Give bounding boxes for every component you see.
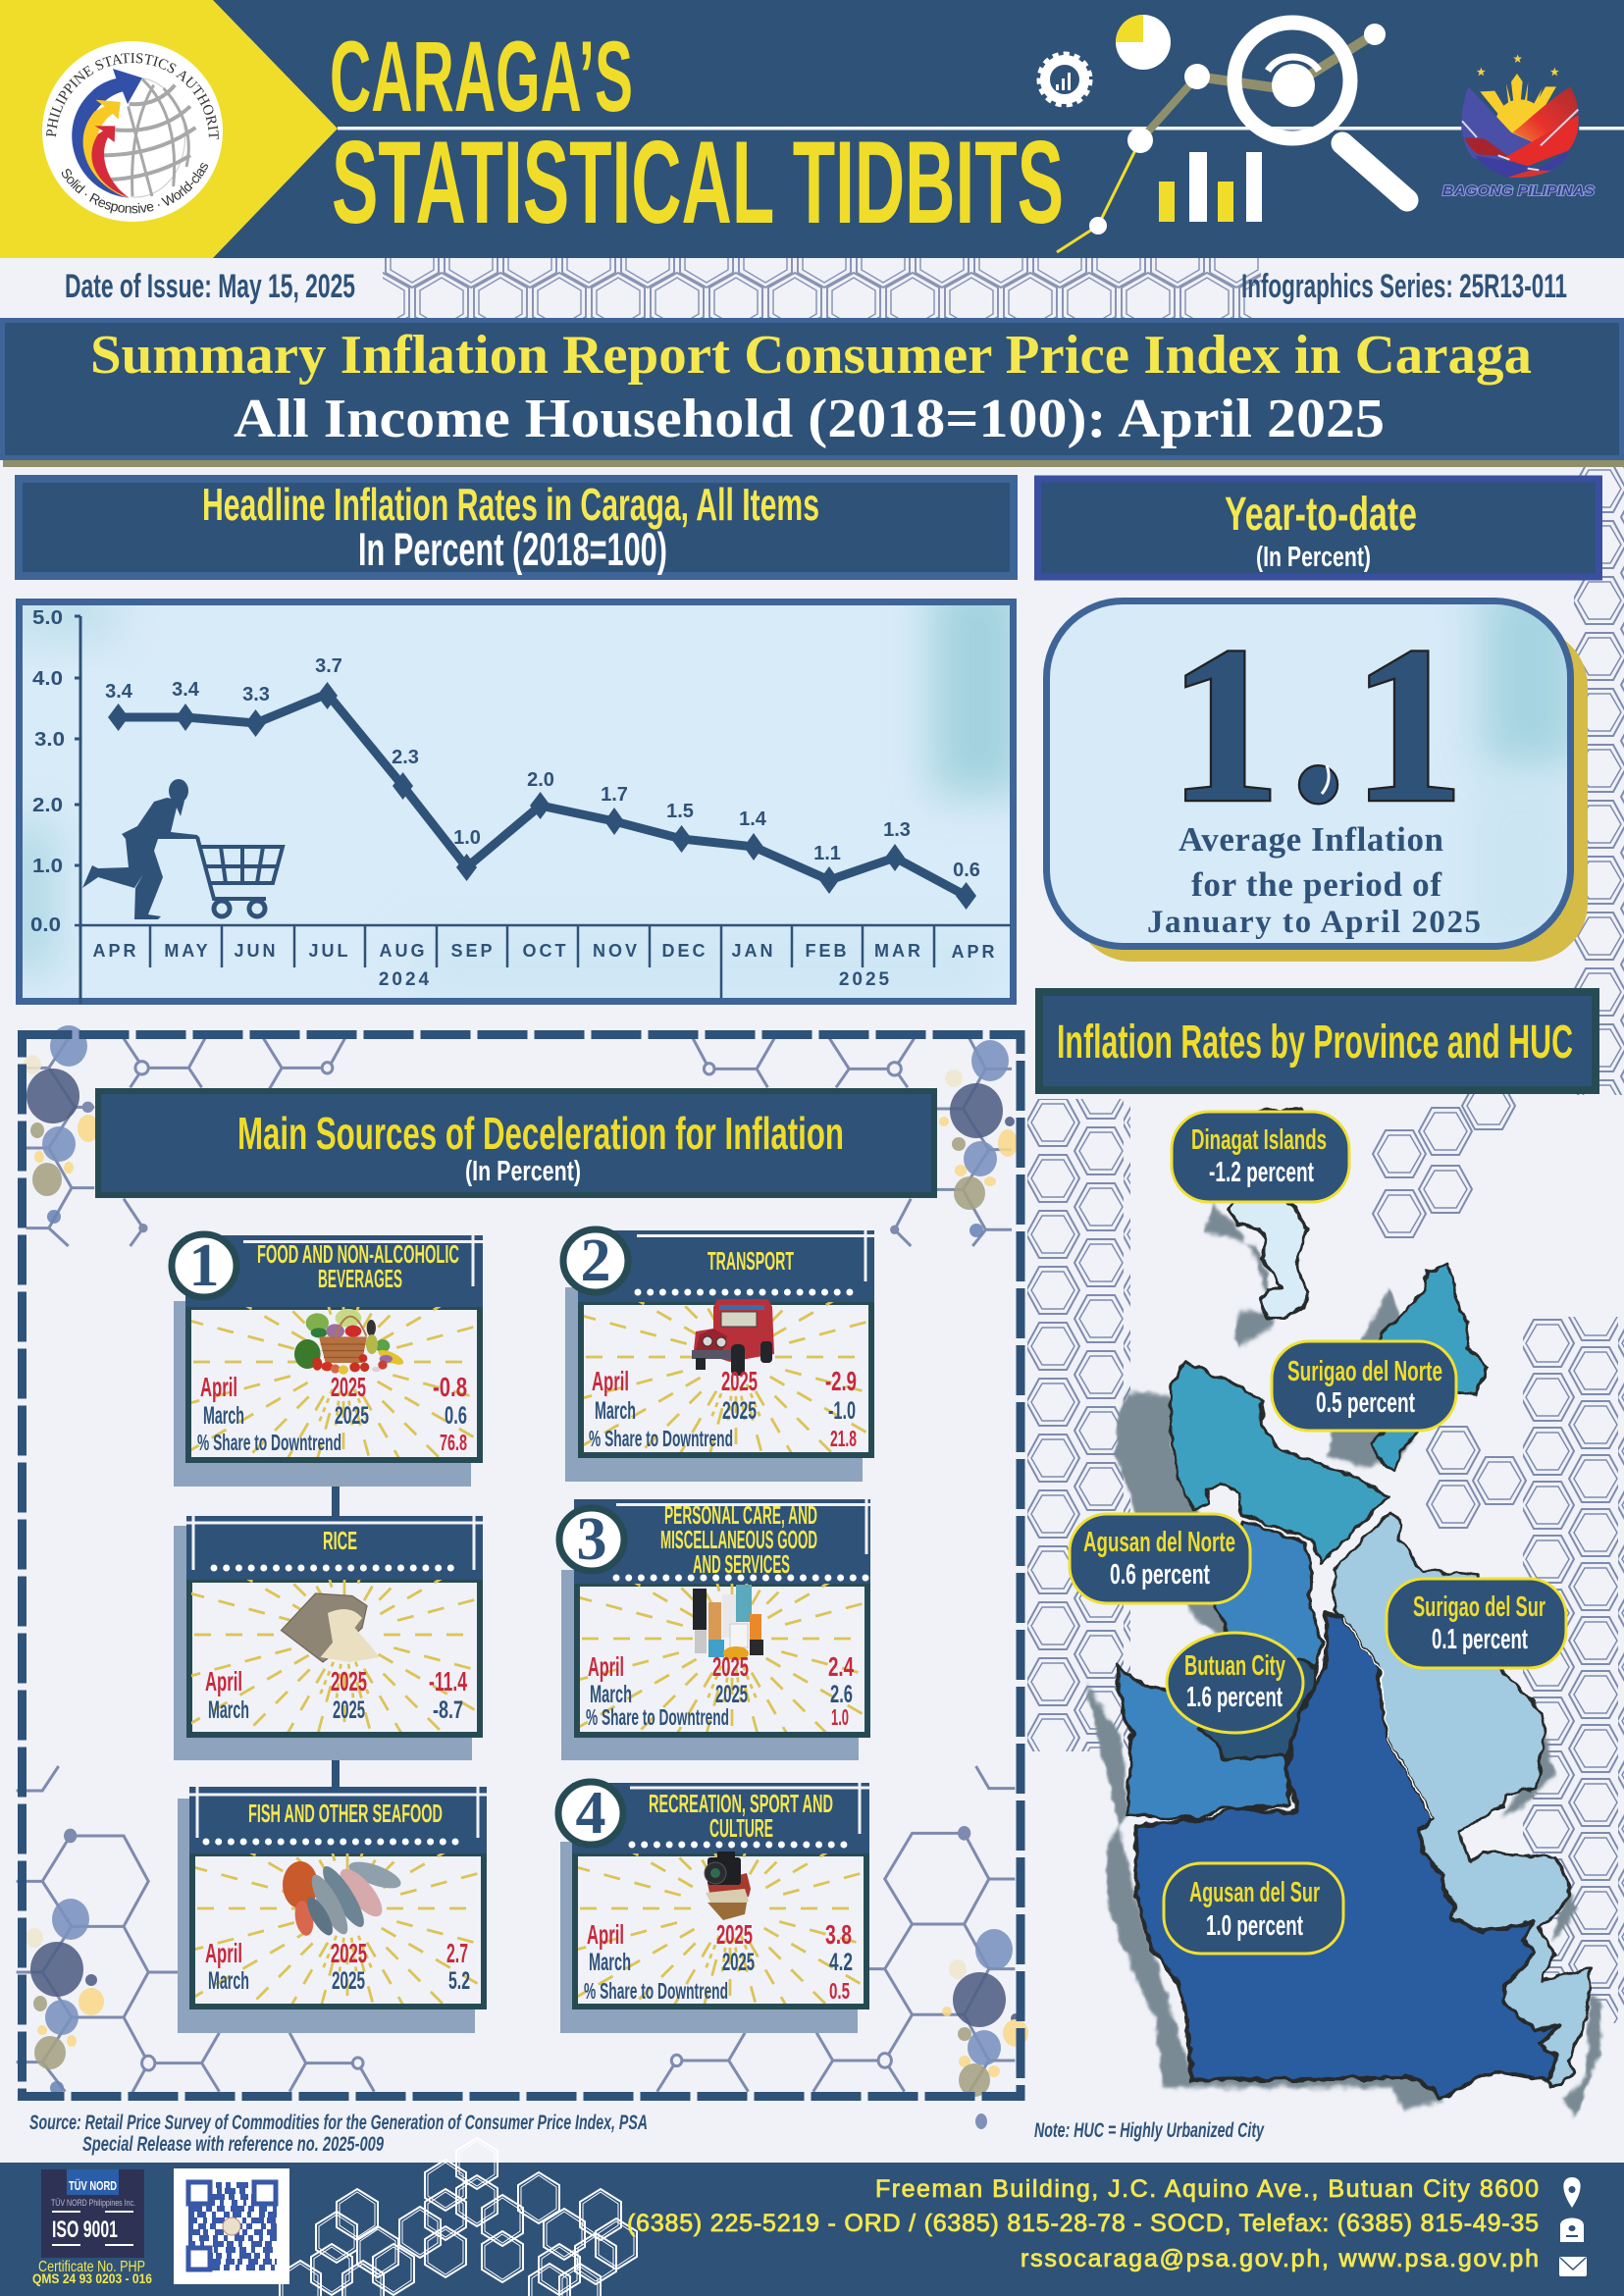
rows: 2025 xyxy=(335,1402,369,1430)
y axis: 3.0 xyxy=(34,729,65,751)
x axis and month labels: APR xyxy=(92,941,139,961)
data labels: 3.3 xyxy=(242,684,270,705)
rows: March xyxy=(589,1949,631,1976)
title: CULTURE xyxy=(709,1813,773,1843)
card: fish and other seafood xyxy=(178,1787,487,2033)
TUV NORD ISO badge xyxy=(32,2169,152,2286)
x axis and month labels: OCT xyxy=(522,941,569,961)
x axis and month labels: AUG xyxy=(379,941,428,961)
rows: April xyxy=(200,1372,237,1402)
rows: 2025 xyxy=(333,1696,365,1724)
data labels: 1.1 xyxy=(813,843,841,864)
y axis: 4.0 xyxy=(32,668,63,690)
inflation line series xyxy=(108,682,976,910)
card: rice xyxy=(174,1516,483,1760)
rank badge xyxy=(559,1506,624,1573)
icon: cosmetics bottles xyxy=(693,1585,763,1660)
icon: jeepney xyxy=(692,1299,774,1376)
rows: March xyxy=(208,1696,249,1724)
Agusan del Norte xyxy=(1117,1520,1321,1819)
rows xyxy=(205,1938,470,1995)
map background hex pattern left xyxy=(1027,1099,1130,1751)
decorative bubbles xyxy=(24,1025,1028,2097)
TUV NORD ISO badge: TÜV NORD Philippines Inc. xyxy=(51,2198,135,2208)
heading: main sources: Main Sources of Deceleration for Inflation xyxy=(237,1108,844,1159)
TUV NORD ISO badge: Certificate No. PHP xyxy=(38,2259,145,2275)
panel: province heading xyxy=(1039,992,1596,1090)
header band xyxy=(0,0,1624,258)
label: Dinagat Islands xyxy=(1172,1112,1349,1202)
rows: 2025 xyxy=(712,1651,749,1682)
y axis: 2.0 xyxy=(32,795,63,816)
rows: -0.8 xyxy=(433,1372,467,1402)
rows: 2025 xyxy=(332,1967,365,1995)
yellow chevron xyxy=(0,0,338,258)
label: Agusan del Norte xyxy=(1070,1514,1250,1603)
label: Surigao del Sur xyxy=(1387,1579,1566,1668)
data labels: 1.0 xyxy=(453,827,481,849)
x axis and month labels: NOV xyxy=(593,941,640,961)
rank badge xyxy=(558,1780,623,1847)
panel: year-to-date heading xyxy=(1038,479,1599,577)
data labels: 0.6 xyxy=(953,860,980,881)
rows: 21.8 xyxy=(830,1426,857,1451)
panel: line chart xyxy=(5,579,1025,1004)
title xyxy=(649,1789,833,1843)
rows: March xyxy=(590,1681,632,1708)
rows: April xyxy=(592,1366,629,1396)
x axis and month labels: JUN xyxy=(234,941,279,961)
main title banner: All Income Household (2018=100): April 2025 xyxy=(234,389,1385,449)
rows: March xyxy=(208,1967,249,1995)
data labels: 3.4 xyxy=(172,679,200,701)
panel: headline heading xyxy=(19,479,1014,576)
rows xyxy=(205,1666,467,1724)
x axis and month labels: 2025 xyxy=(839,969,892,990)
main title: STATISTICAL TIDBITS xyxy=(332,117,1064,248)
label: Agusan del Norte: Agusan del Norte xyxy=(1083,1527,1235,1558)
contact details: (6385) 225-5219 - ORD / (6385) 815-28-78 - SOCD, Telefax: (6385) 815-49-35 xyxy=(627,2210,1539,2237)
data labels: 3.4 xyxy=(105,681,133,703)
rows xyxy=(586,1651,854,1730)
rows: 2025 xyxy=(331,1666,367,1696)
y axis: 0.0 xyxy=(30,914,61,936)
contact details: rssocaraga@psa.gov.ph, www.psa.gov.ph xyxy=(1021,2245,1539,2272)
rows: 2.4 xyxy=(828,1651,854,1682)
x axis and month labels: FEB xyxy=(805,941,850,961)
rows: 2025 xyxy=(722,1397,757,1425)
main title banner: Summary Inflation Report Consumer Price Index in Caraga xyxy=(90,325,1532,386)
title: RICE xyxy=(323,1526,357,1555)
x axis and month labels: 2024 xyxy=(379,969,432,990)
icon: food basket xyxy=(294,1309,405,1375)
rows: March xyxy=(595,1397,636,1425)
HUC note xyxy=(975,2113,1265,2142)
map shadow xyxy=(1086,1205,1601,2117)
rows: April xyxy=(205,1666,242,1696)
Bagong Pilipinas logo xyxy=(1442,54,1595,199)
main title banner xyxy=(2,320,1624,467)
TUV NORD ISO badge: ISO 9001 xyxy=(52,2217,118,2243)
label: Surigao del Sur: Surigao del Sur xyxy=(1413,1592,1545,1623)
heading: main sources: (In Percent) xyxy=(465,1156,581,1187)
label: Surigao del Norte: Surigao del Norte xyxy=(1287,1356,1442,1387)
icon: shopper pushing cart xyxy=(82,779,283,919)
y axis: 5.0 xyxy=(32,607,63,629)
card 1: food and non-alcoholic beverages xyxy=(169,1230,483,1487)
x axis and month labels: APR xyxy=(951,942,998,962)
rows: 2025 xyxy=(331,1938,367,1968)
title: FOOD AND NON-ALCOHOLIC xyxy=(257,1239,459,1269)
title: BEVERAGES xyxy=(318,1264,402,1293)
source note xyxy=(29,2112,648,2156)
rows: 1.0 xyxy=(831,1704,849,1730)
icon: envelope xyxy=(1559,2257,1587,2276)
x axis and month labels xyxy=(75,925,1011,998)
rows: -8.7 xyxy=(433,1696,463,1724)
map of Caraga xyxy=(1086,1109,1601,2117)
connector lines xyxy=(332,1460,340,1790)
icon: fish and crab xyxy=(283,1856,404,1939)
big number: 1.1 xyxy=(1169,601,1464,849)
data labels: 1.3 xyxy=(883,819,911,841)
card 2: transport xyxy=(559,1226,874,1482)
right side hex pattern xyxy=(1574,467,1624,1095)
label: Agusan del Sur: 1.0 percent xyxy=(1206,1910,1303,1942)
rows: 4.2 xyxy=(829,1949,853,1976)
title xyxy=(257,1239,459,1293)
icon: telephone xyxy=(1560,2218,1584,2242)
rows: 2025 xyxy=(715,1681,748,1708)
Surigao del Sur xyxy=(1335,1514,1590,2087)
icon: data magnifier graphic xyxy=(1039,15,1407,252)
rows: % Share to Downtrend xyxy=(584,1978,728,2004)
rows: 5.2 xyxy=(448,1967,470,1995)
rows: April xyxy=(588,1651,624,1682)
title: TRANSPORT xyxy=(707,1246,794,1276)
rows xyxy=(584,1919,853,2004)
icon: rice sack xyxy=(281,1593,379,1662)
caption: for the period of xyxy=(1191,865,1441,904)
label: Surigao del Sur: 0.1 percent xyxy=(1432,1624,1528,1655)
x axis and month labels: JAN xyxy=(731,941,776,961)
panel: year-to-date heading: Year-to-date xyxy=(1225,489,1417,541)
rows: -11.4 xyxy=(429,1666,467,1696)
Surigao del Norte xyxy=(1171,1265,1489,1563)
title: RECREATION, SPORT AND xyxy=(649,1789,833,1818)
panel: headline heading: Headline Inflation Rates in Caraga, All Items xyxy=(202,479,819,530)
x axis and month labels: MAR xyxy=(874,941,923,961)
rows: March xyxy=(203,1402,244,1430)
rows: 2025 xyxy=(716,1919,753,1950)
map background hex pattern right xyxy=(1523,1317,1624,2023)
title: AND SERVICES xyxy=(693,1549,790,1579)
caption: Average Inflation xyxy=(1179,820,1443,859)
rows: -2.9 xyxy=(825,1366,857,1396)
caption: January to April 2025 xyxy=(1147,905,1481,940)
rank badge xyxy=(563,1227,628,1294)
data labels: 2.0 xyxy=(527,769,554,791)
rank badge xyxy=(172,1232,236,1299)
rows: 2025 xyxy=(722,1949,755,1976)
panel: main sources frame xyxy=(17,1025,1028,2097)
rows: -1.0 xyxy=(828,1397,856,1425)
rows: 0.6 xyxy=(445,1402,467,1430)
Butuan City xyxy=(1201,1659,1317,1759)
QR code xyxy=(174,2168,289,2284)
card 3: personal care xyxy=(555,1499,870,1760)
label: Agusan del Norte: 0.6 percent xyxy=(1110,1559,1210,1591)
panel: year-to-date value card xyxy=(1046,579,1588,962)
x axis and month labels: SEP xyxy=(450,941,496,961)
rows: 0.5 xyxy=(829,1978,850,2004)
panel: headline heading: In Percent (2018=100) xyxy=(358,523,667,575)
contact details: Freeman Building, J.C. Aquino Ave., Butuan City 8600 xyxy=(875,2175,1539,2203)
panel: year-to-date heading: (In Percent) xyxy=(1256,542,1371,573)
date of issue: Date of Issue: May 15, 2025 xyxy=(65,268,355,305)
x axis and month labels: JUL xyxy=(308,941,351,961)
label: Surigao del Norte: 0.5 percent xyxy=(1316,1387,1415,1419)
rows: 2.6 xyxy=(830,1681,853,1708)
x axis and month labels: MAY xyxy=(164,941,211,961)
PSA logo xyxy=(42,41,223,222)
label: Dinagat Islands: -1.2 percent xyxy=(1209,1157,1314,1188)
contact details xyxy=(627,2175,1539,2272)
title xyxy=(660,1500,817,1579)
rows: % Share to Downtrend xyxy=(586,1704,729,1730)
label: Agusan del Sur xyxy=(1164,1863,1343,1954)
rows: 2.7 xyxy=(446,1938,468,1968)
caption xyxy=(1147,820,1481,940)
title: FISH AND OTHER SEAFOOD xyxy=(248,1799,443,1828)
y axis xyxy=(30,607,80,1004)
x axis and month labels: DEC xyxy=(661,941,708,961)
rows: April xyxy=(587,1919,624,1950)
y axis: 1.0 xyxy=(32,856,63,877)
TUV NORD ISO badge: TÜV NORD xyxy=(69,2178,117,2193)
icon: camera and books xyxy=(705,1852,751,1920)
icon: location pin xyxy=(1563,2177,1581,2208)
Agusan del Sur xyxy=(1136,1613,1559,2098)
label: Butuan City: Butuan City xyxy=(1184,1650,1285,1682)
data labels: 3.7 xyxy=(315,655,342,677)
data labels: 2.3 xyxy=(392,747,419,768)
title: PERSONAL CARE, AND xyxy=(664,1500,817,1530)
rows: 2025 xyxy=(721,1366,758,1396)
main title xyxy=(330,21,1064,248)
label: Butuan City: 1.6 percent xyxy=(1186,1682,1283,1713)
Bagong Pilipinas logo: BAGONG PILIPINAS xyxy=(1442,183,1595,199)
rows xyxy=(589,1366,857,1451)
rows: 76.8 xyxy=(440,1430,467,1455)
footer xyxy=(0,2138,1624,2296)
date row background pattern xyxy=(383,258,1261,318)
TUV NORD ISO badge: QMS 24 93 0203 - 016 xyxy=(32,2270,152,2286)
rank badge: 1 xyxy=(188,1232,220,1299)
source note: Special Release with reference no. 2025-009 xyxy=(82,2133,384,2156)
data labels: 1.5 xyxy=(666,801,694,822)
rows: 2025 xyxy=(331,1372,366,1402)
rows: 3.8 xyxy=(825,1919,852,1950)
label: Agusan del Sur: Agusan del Sur xyxy=(1189,1877,1320,1908)
label: Butuan City xyxy=(1167,1633,1303,1733)
data labels: 1.7 xyxy=(601,784,628,806)
label: Surigao del Norte xyxy=(1272,1341,1456,1431)
title: MISCELLANEOUS GOOD xyxy=(660,1525,817,1554)
rows: % Share to Downtrend xyxy=(197,1430,341,1455)
source note: Source: Retail Price Survey of Commodities for the Generation of Consumer Price Index, PSA xyxy=(29,2112,648,2134)
data labels: 1.4 xyxy=(739,809,767,830)
heading: main sources xyxy=(98,1091,934,1195)
main title: CARAGA’S xyxy=(330,21,633,132)
data labels xyxy=(105,655,980,881)
rows: April xyxy=(205,1938,242,1968)
rank badge: 3 xyxy=(577,1506,606,1573)
HUC note: Note: HUC = Highly Urbanized City xyxy=(1034,2119,1265,2142)
Dinagat Islands xyxy=(1231,1109,1309,1318)
label: Dinagat Islands: Dinagat Islands xyxy=(1191,1124,1327,1156)
rank badge: 4 xyxy=(575,1780,606,1847)
rank badge: 2 xyxy=(581,1227,610,1294)
card 4: recreation, sport and culture xyxy=(555,1778,869,2033)
rows xyxy=(197,1372,467,1455)
rows: % Share to Downtrend xyxy=(589,1426,733,1451)
